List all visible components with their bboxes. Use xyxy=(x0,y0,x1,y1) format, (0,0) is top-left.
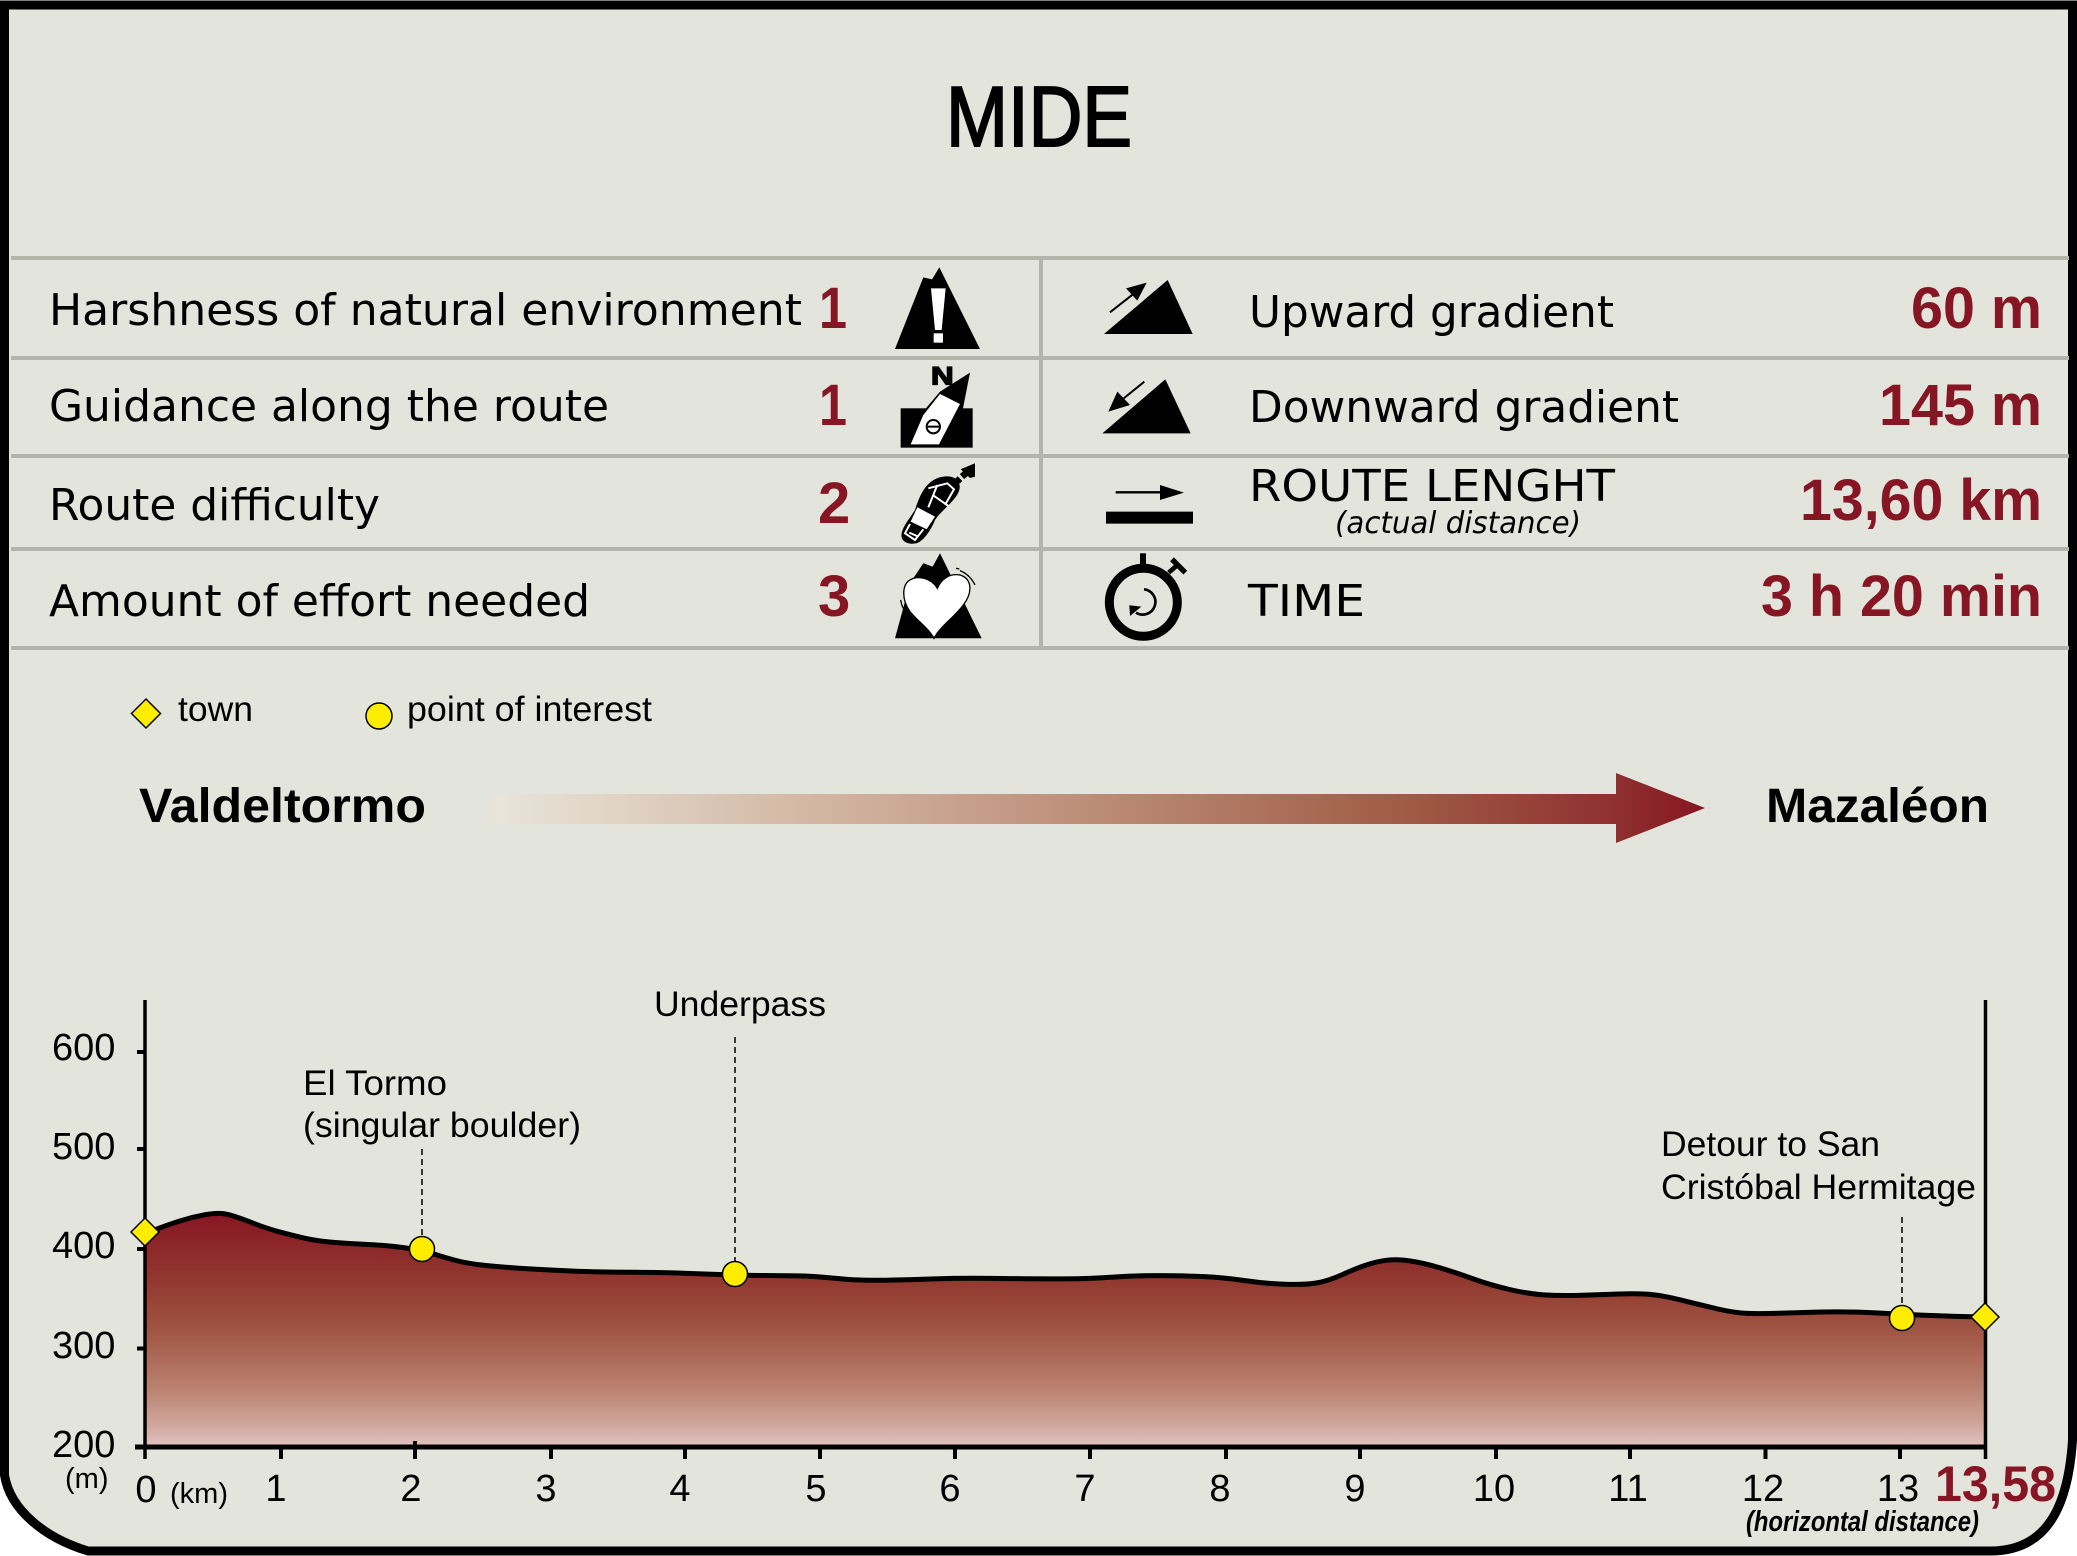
icon: stopwatch xyxy=(1109,553,1185,636)
callout: Detour: Detour to San xyxy=(1661,1125,1880,1164)
arrow: route direction xyxy=(493,773,1705,843)
y axis labels: 200 xyxy=(52,1424,115,1466)
value: route difficulty: 2 xyxy=(818,471,850,536)
x axis labels: 11 xyxy=(1608,1468,1648,1510)
label: route length: ROUTE LENGHT xyxy=(1249,461,1615,512)
icon: route length xyxy=(1106,485,1193,524)
value: guidance: 1 xyxy=(819,373,847,438)
y axis labels: 600 xyxy=(52,1027,115,1069)
x axis xyxy=(135,1000,1987,1459)
x axis labels: 0 xyxy=(135,1469,157,1511)
start town: Valdeltormo xyxy=(139,780,426,833)
dashed leaders xyxy=(422,1037,1902,1305)
label: upward gradient: Upward gradient xyxy=(1249,287,1614,338)
panel: MIDE table xyxy=(11,256,2069,650)
icon: compass: N xyxy=(931,363,954,390)
legend: town label: town xyxy=(178,690,253,729)
value: time: 3 h 20 min xyxy=(1761,564,2042,629)
x axis labels: (km) xyxy=(170,1478,228,1510)
x axis labels: 5 xyxy=(805,1468,827,1510)
icon: downward gradient xyxy=(1102,379,1191,433)
label: effort: Amount of effort needed xyxy=(49,576,590,627)
horizontal distance note: (horizontal distance) xyxy=(1746,1506,1979,1538)
legend: point of interest marker xyxy=(366,703,392,729)
x axis labels: 8 xyxy=(1209,1468,1231,1510)
value: route length: 13,60 km xyxy=(1800,468,2042,533)
value: upward gradient: 60 m xyxy=(1911,276,2042,341)
icon: heart mountain xyxy=(895,553,982,638)
x axis labels: 3 xyxy=(535,1468,557,1510)
label: time: TIME xyxy=(1247,576,1365,627)
x axis labels: 13 xyxy=(1877,1468,1919,1510)
x axis labels: 10 xyxy=(1473,1468,1515,1510)
markers: towns xyxy=(131,1218,1999,1331)
title: MIDE xyxy=(946,70,1132,165)
legend: town marker xyxy=(132,699,160,728)
total distance: 13,58 xyxy=(1935,1456,2056,1512)
end town: Mazaléon xyxy=(1766,780,1989,833)
markers: points of interest xyxy=(410,1236,1914,1330)
value: downward gradient: 145 m xyxy=(1879,373,2042,438)
x axis labels: 1 xyxy=(265,1468,287,1510)
value: harshness: 1 xyxy=(819,276,847,341)
label: harshness: Harshness of natural environment xyxy=(49,285,802,336)
callout: El Tormo: El Tormo xyxy=(303,1064,447,1103)
label: guidance: Guidance along the route xyxy=(49,381,609,432)
callout: El Tormo: (singular boulder) xyxy=(303,1106,581,1145)
x axis labels: 9 xyxy=(1344,1468,1366,1510)
x axis labels: 6 xyxy=(939,1468,961,1510)
legend xyxy=(132,690,652,729)
x axis labels: 7 xyxy=(1074,1468,1096,1510)
value: effort: 3 xyxy=(818,564,850,629)
icon: warning mountain xyxy=(895,267,980,349)
label: actual distance note: (actual distance) xyxy=(1335,506,1581,541)
icon: upward gradient xyxy=(1104,280,1193,334)
y axis labels: 400 xyxy=(52,1225,115,1267)
y axis labels: 500 xyxy=(52,1126,115,1168)
x axis labels: 2 xyxy=(400,1468,422,1510)
x axis labels: 4 xyxy=(669,1468,691,1510)
chart: elevation profile xyxy=(52,985,2056,1538)
label: downward gradient: Downward gradient xyxy=(1249,382,1679,433)
icon: compass xyxy=(901,363,973,448)
callout: Detour xyxy=(1661,1125,1976,1207)
y axis labels xyxy=(52,1027,115,1495)
label: route difficulty: Route difficulty xyxy=(49,480,380,531)
profile area xyxy=(145,1213,1986,1447)
callout: El Tormo xyxy=(303,1064,581,1145)
y axis xyxy=(137,1000,145,1459)
x axis labels: 12 xyxy=(1742,1468,1784,1510)
y axis labels: (m) xyxy=(65,1463,108,1495)
profile line xyxy=(145,1213,1986,1317)
legend: point of interest label: point of interest xyxy=(407,690,652,729)
y axis labels: 300 xyxy=(52,1325,115,1367)
x axis labels xyxy=(135,1468,1919,1511)
callout: Detour: Cristóbal Hermitage xyxy=(1661,1168,1976,1207)
icon: boot sole xyxy=(901,463,975,544)
callout: Underpass: Underpass xyxy=(654,985,826,1024)
